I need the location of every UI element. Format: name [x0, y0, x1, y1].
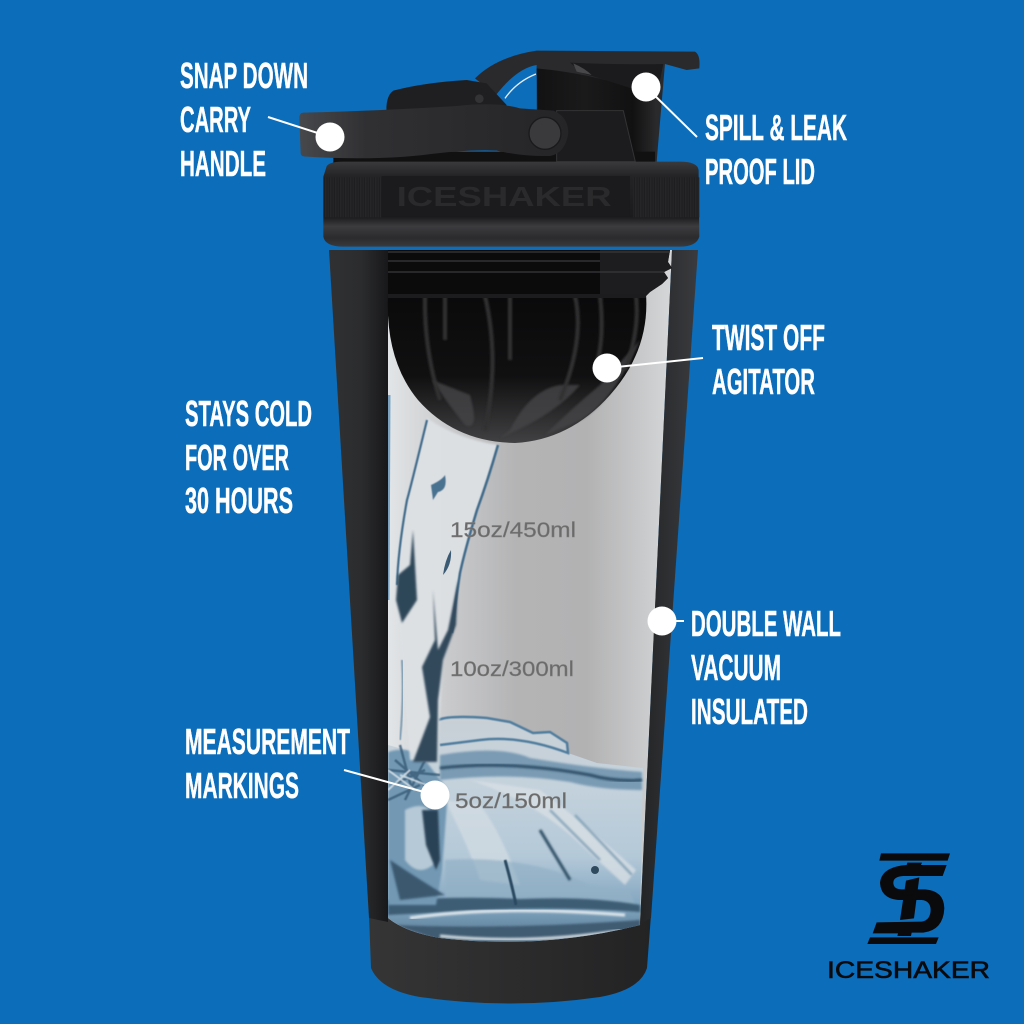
- callout: twist off agitator: [592, 317, 825, 402]
- right wall: [640, 250, 698, 924]
- stream right edge: [452, 445, 498, 633]
- text: stays cold: STAYS COLD: [185, 393, 312, 434]
- rear lid cap: [386, 80, 507, 120]
- text: stays cold: [185, 393, 312, 521]
- flip-top spout: [475, 51, 700, 162]
- water illustration: [388, 717, 643, 942]
- callout: spill and leak proof lid: PROOF LID: [705, 151, 815, 192]
- handle pivot: [529, 117, 561, 149]
- lid shoulder: [557, 111, 635, 162]
- text: stays cold: 30 HOURS: [185, 480, 293, 521]
- ring logo text: ICESHAKER: [397, 181, 612, 212]
- hinge pin: [475, 94, 484, 103]
- marking: 5oz: 5oz/150ml: [455, 790, 567, 813]
- callout: snap down carry handle: HANDLE: [180, 143, 266, 184]
- left splash: [388, 750, 448, 905]
- callout: double wall vacuum insulated: VACUUM: [691, 647, 781, 688]
- marking: 10oz: 10oz/300ml: [450, 658, 574, 681]
- callout: spill and leak proof lid: SPILL & LEAK: [705, 107, 847, 148]
- transparent window: [388, 250, 672, 942]
- callout: twist off agitator: TWIST OFF: [712, 317, 825, 358]
- callout: snap down carry handle: CARRY: [180, 99, 251, 140]
- stream left edge: [397, 420, 427, 585]
- bottle: [299, 51, 700, 1004]
- callout: measurement markings: [185, 721, 450, 810]
- text: stays cold: FOR OVER: [185, 437, 289, 478]
- carry handle strap: [299, 104, 568, 158]
- dome facets: [432, 340, 640, 438]
- callout: snap down carry handle: [180, 55, 344, 184]
- measurement markings: [450, 519, 576, 813]
- callout: double wall vacuum insulated: INSULATED: [691, 691, 808, 732]
- water body: [388, 717, 643, 942]
- callout: snap down carry handle: SNAP DOWN: [180, 55, 308, 96]
- left wall: [329, 250, 388, 922]
- lid and carry handle: [299, 51, 700, 247]
- bottle base: [369, 915, 651, 1004]
- pouring water stream: [388, 395, 498, 762]
- infographic canvas: [180, 50, 990, 1004]
- callout: double wall vacuum insulated: DOUBLE WALL: [691, 603, 841, 644]
- brand logo: [827, 853, 990, 984]
- threaded ring: [323, 162, 699, 247]
- foam band: [440, 751, 642, 790]
- agitator dome: [388, 294, 646, 443]
- logo mark: [867, 853, 950, 944]
- bottom ripples: [388, 898, 640, 915]
- lid neck: [333, 152, 655, 163]
- callout: twist off agitator: AGITATOR: [712, 361, 815, 402]
- callout: spill and leak proof lid: [632, 72, 847, 192]
- agitator threads: [388, 250, 672, 296]
- callout: measurement markings: MEASUREMENT: [185, 721, 350, 762]
- marking: 15oz: 15oz/450ml: [450, 519, 576, 542]
- logo wordmark: ICESHAKER: [827, 957, 990, 984]
- callout: measurement markings: MARKINGS: [185, 765, 299, 806]
- callout: double wall vacuum insulated: [648, 603, 841, 732]
